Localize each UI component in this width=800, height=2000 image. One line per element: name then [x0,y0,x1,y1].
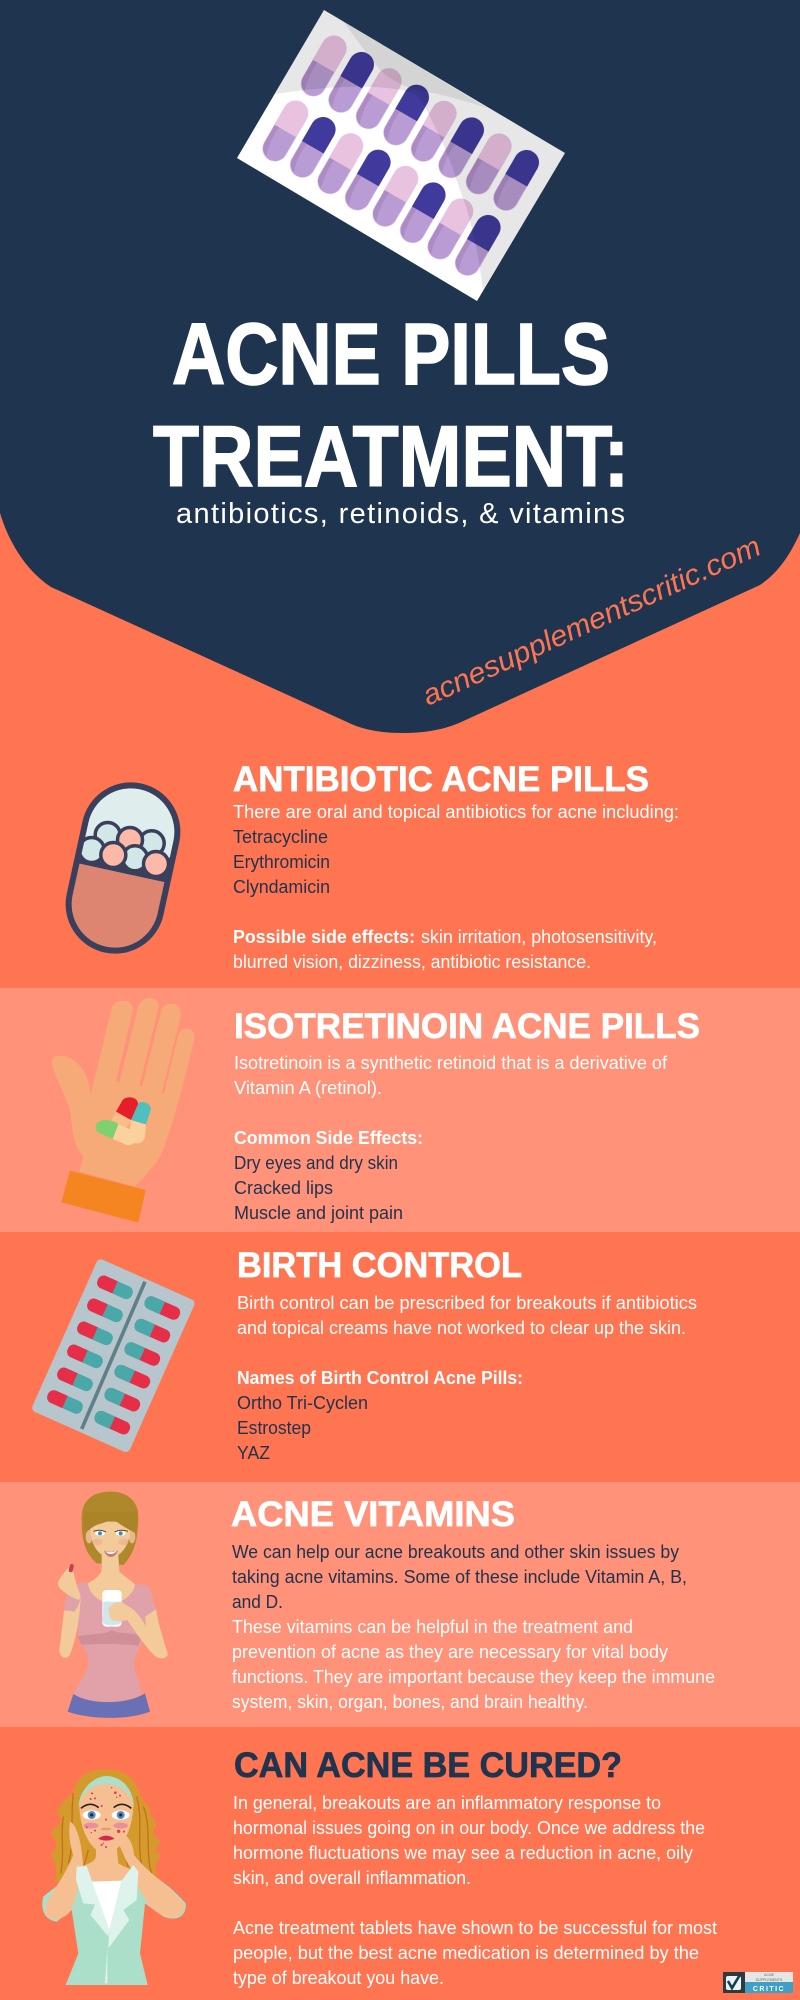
heading: CAN ACNE BE CURED? [234,1746,622,1785]
panel: isotretinoin acne pills [0,988,800,1232]
logo: acne supplements critic: SUPPLEMENTS [756,1978,783,1982]
body text: skin, and overall inflammation. [233,1868,471,1888]
subtitle: antibiotics, retinoids, & vitamins [176,498,625,530]
body text: Possible side effects: [233,927,415,947]
body text: blurred vision, dizziness, antibiotic resistance. [233,952,591,972]
body text: Isotretinoin is a synthetic retinoid that is a derivative of [234,1053,668,1073]
title: TREATMENT: [153,409,629,505]
panel: birth control [0,1232,800,1482]
body text: Vitamin A (retinol). [234,1078,382,1098]
panel: acne vitamins [0,1482,800,1727]
logo: acne supplements critic [723,1972,793,1993]
body text: Dry eyes and dry skin [234,1153,398,1173]
panel: can acne be cured [0,1727,800,2000]
body text: taking acne vitamins. Some of these include Vitamin A, B, [232,1567,687,1587]
heading: BIRTH CONTROL [237,1246,522,1285]
heading: ACNE VITAMINS [231,1495,515,1534]
body text: prevention of acne as they are necessary for vital body [232,1642,668,1662]
body text: Clyndamicin [233,877,330,897]
body text: Tetracycline [233,827,328,847]
body text: and topical creams have not worked to clear up the skin. [237,1318,686,1338]
body text: We can help our acne breakouts and other skin issues by [232,1542,679,1562]
body text: YAZ [237,1443,270,1463]
logo: acne supplements critic: ACNE [764,1973,775,1977]
logo: acne supplements critic: CRITIC [753,1986,785,1993]
body text [233,802,679,972]
body text: Ortho Tri-Cyclen [237,1393,368,1413]
icon: woman with acne [42,1770,186,1985]
body text: Muscle and joint pain [234,1203,403,1223]
body text [232,1542,715,1712]
heading: ISOTRETINOIN ACNE PILLS [234,1007,700,1046]
icon: hand holding pills [52,998,194,1223]
body text [234,1053,668,1223]
navy header shape [0,0,800,733]
panel: header [0,0,800,733]
icon: capsule with beads [59,776,187,960]
title [153,306,629,505]
title: ACNE PILLS [172,306,610,403]
body text: In general, breakouts are an inflammatory response to [233,1793,661,1813]
panel: antibiotic acne pills [0,735,800,988]
body text: Erythromicin [233,852,330,872]
body text: There are oral and topical antibiotics for acne including: [233,802,679,822]
body text: system, skin, organ, bones, and brain healthy. [232,1692,588,1712]
body text: Acne treatment tablets have shown to be successful for most [233,1918,717,1938]
icon: birth control blister [31,1258,196,1453]
body text: These vitamins can be helpful in the treatment and [232,1617,633,1637]
icon: pill blister pack [237,10,565,301]
website url: acnesupplementscritic.com [418,531,766,712]
body text [237,1293,697,1463]
body text: Estrostep [237,1418,311,1438]
heading: ANTIBIOTIC ACNE PILLS [233,760,649,799]
icon: woman taking a pill [58,1492,168,1718]
body text: type of breakout you have. [233,1968,444,1988]
body text: Birth control can be prescribed for breakouts if antibiotics [237,1293,697,1313]
body text: skin irritation, photosensitivity, [421,927,657,947]
body text: and D. [232,1592,283,1612]
body text: hormonal issues going on in our body. Once we address the [233,1818,705,1838]
body text: Cracked lips [234,1178,333,1198]
body text: people, but the best acne medication is determined by the [233,1943,699,1963]
body text: hormone fluctuations we may see a reduction in acne, oily [233,1843,693,1863]
body text: Common Side Effects: [234,1128,423,1148]
body text: functions. They are important because they keep the immune [232,1667,715,1687]
body text [233,1793,717,1988]
body text: Names of Birth Control Acne Pills: [237,1368,523,1388]
